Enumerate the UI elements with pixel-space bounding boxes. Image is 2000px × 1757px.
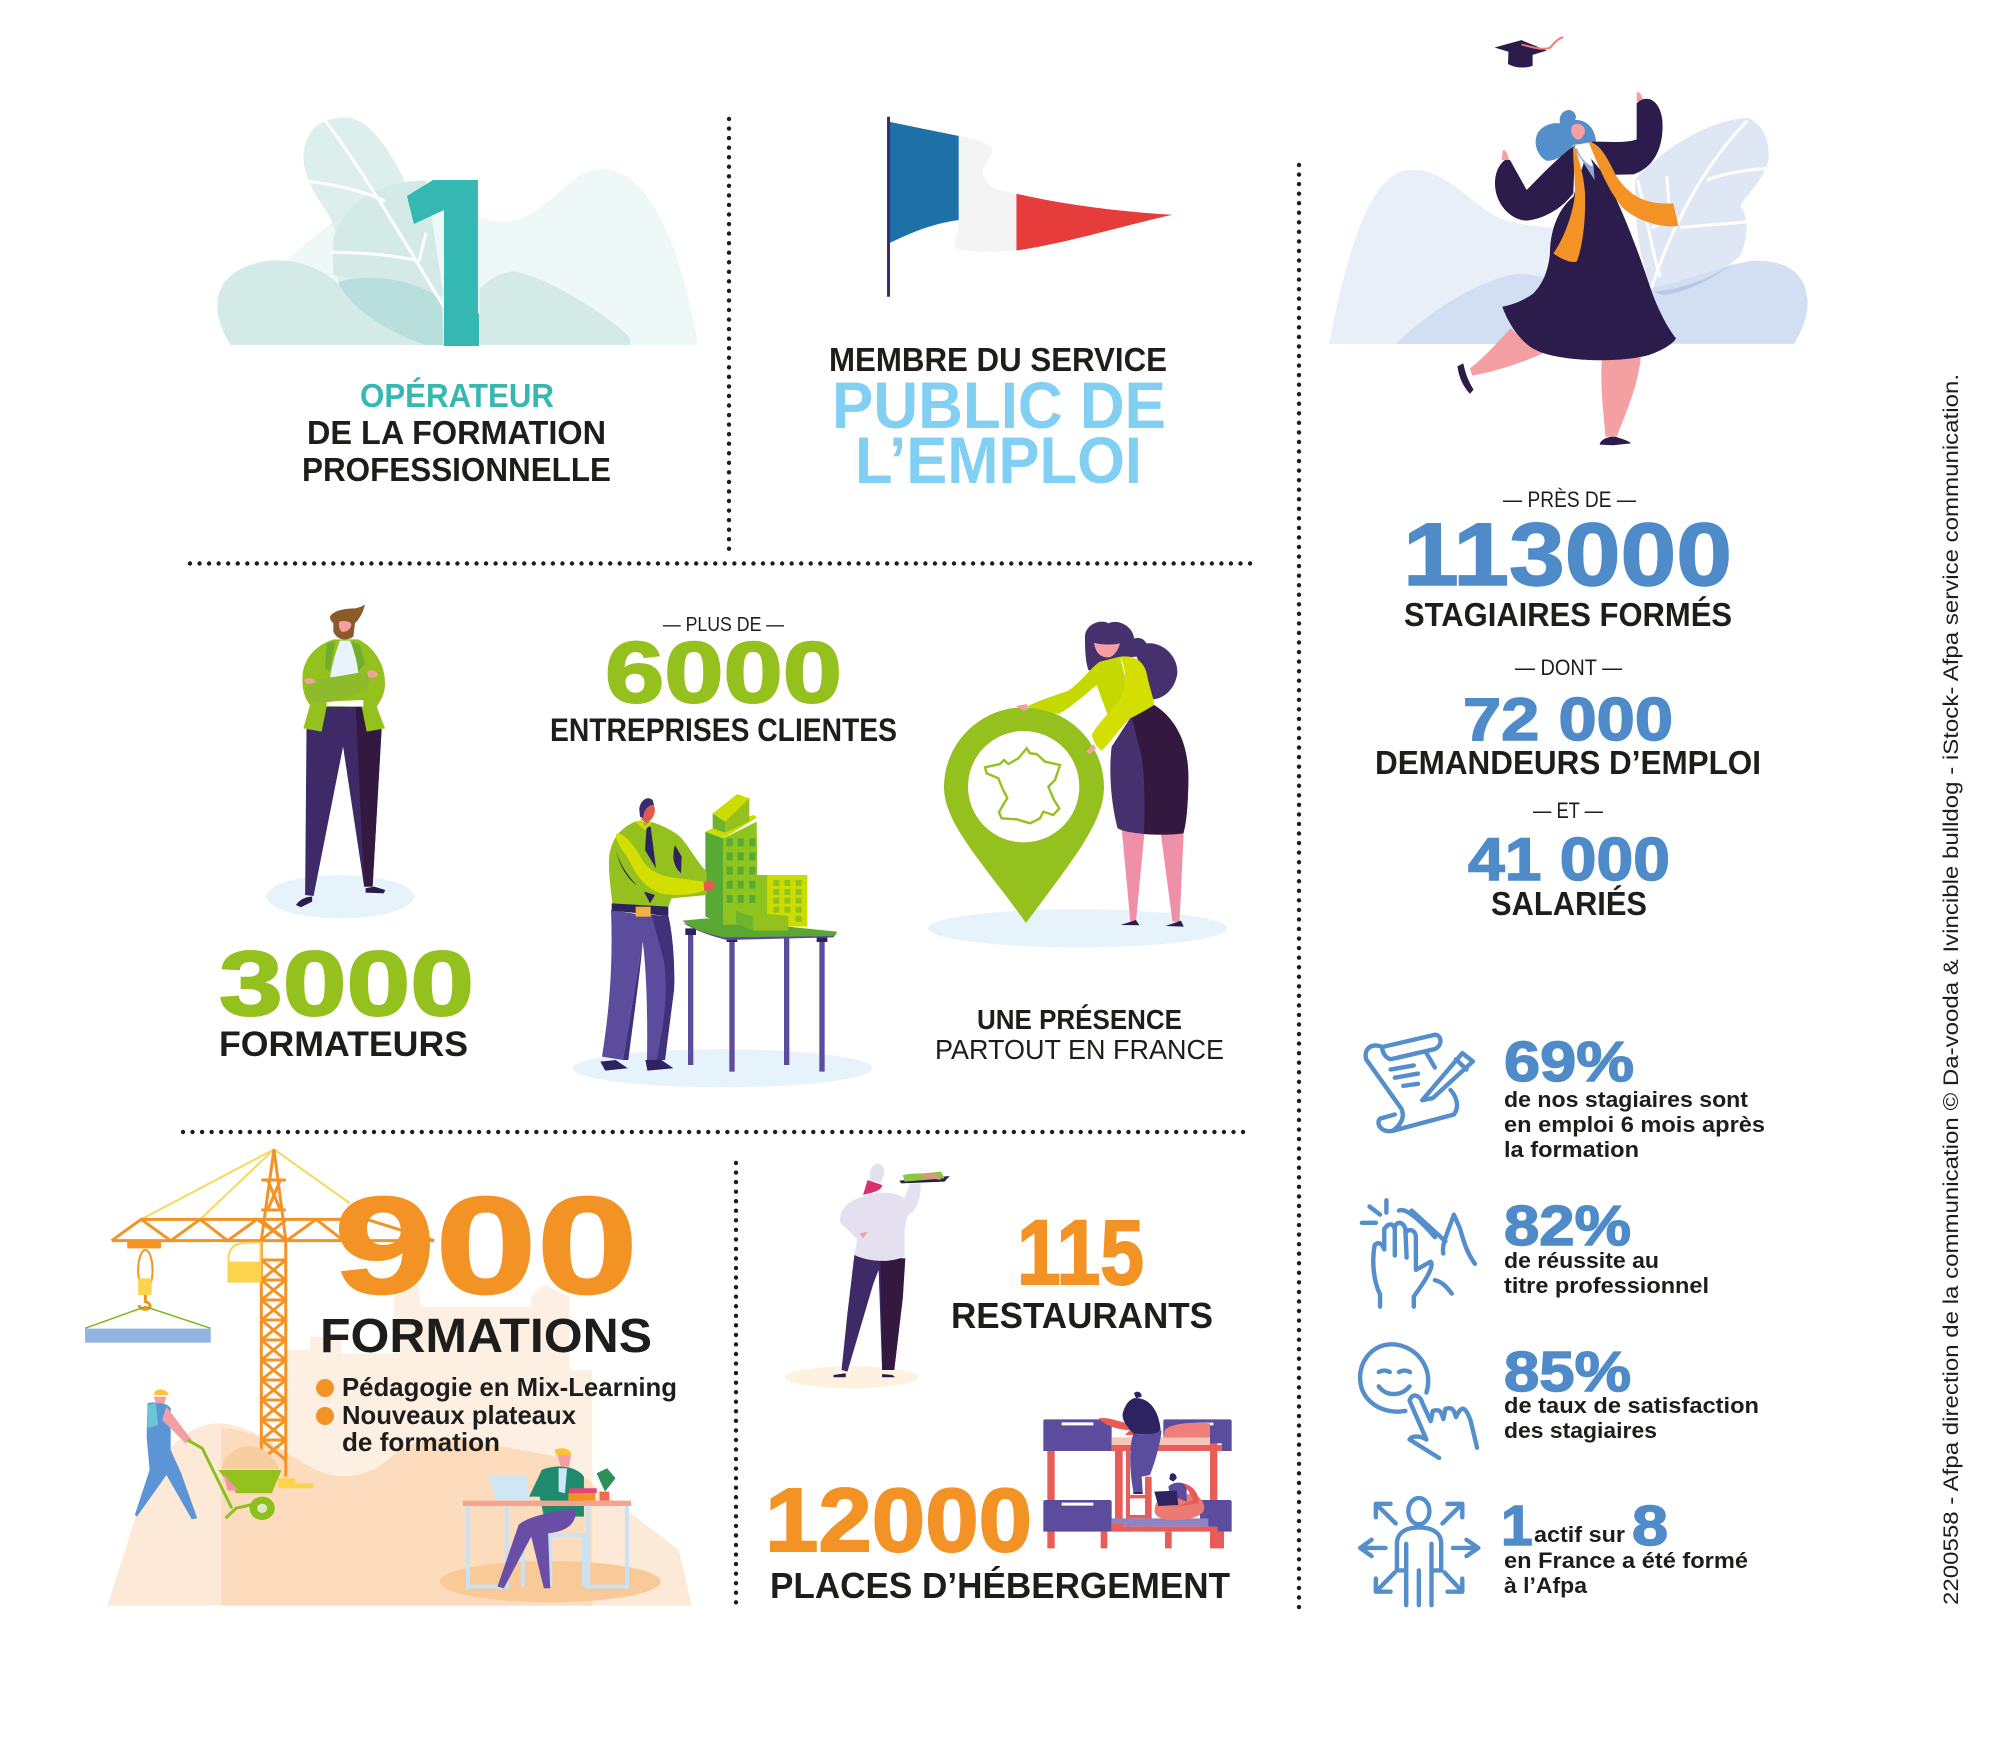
stat: 1 actif sur 8: 1 xyxy=(1501,1494,1533,1558)
illustration: graduate with plants xyxy=(1329,37,1808,445)
list: pédagogie et plateaux: de formation xyxy=(342,1427,500,1457)
panel: stagiaires xyxy=(1329,37,1808,922)
stat: 85%: des stagiaires xyxy=(1504,1418,1657,1443)
stat: 1 actif sur 8: en France a été formé xyxy=(1504,1548,1748,1573)
text: membre du service: MEMBRE DU SERVICE xyxy=(829,341,1167,378)
heading: public de l'emploi xyxy=(832,368,1166,497)
stat: 41 000 salariés: 41 000 xyxy=(1468,826,1670,893)
stat: 72 000 demandeurs: 72 000 xyxy=(1463,686,1673,753)
stat: 85% xyxy=(1504,1340,1759,1443)
woman and pin xyxy=(944,622,1188,923)
panel: 6000 entreprises clientes xyxy=(550,614,897,1087)
stat: 82%: titre professionnel xyxy=(1504,1273,1709,1298)
number: 3000: 3000 xyxy=(219,933,474,1035)
number: 115: 115 xyxy=(1017,1202,1144,1304)
credit line: 2200558 - Afpa direction de la communication © Da-vooda & Ivincible bulldog - iStock- Afpa service communication. xyxy=(1940,374,1963,1605)
list: pédagogie et plateaux: Nouveaux plateaux xyxy=(342,1400,577,1430)
illustration: businessman with building model xyxy=(573,794,872,1087)
number: 12000: 12000 xyxy=(765,1471,1032,1571)
stat: 82% xyxy=(1504,1194,1709,1298)
panel: 85% satisfaction xyxy=(1360,1340,1759,1458)
panel: 12000 places d'hébergement xyxy=(765,1392,1232,1606)
text: de la formation professionnelle xyxy=(302,414,611,488)
heading: formations: FORMATIONS xyxy=(320,1310,652,1363)
label: entreprises clientes: ENTREPRISES CLIENTES xyxy=(550,712,897,748)
stat: 82%: de réussite au xyxy=(1504,1248,1659,1273)
icon: french flag xyxy=(889,117,1172,297)
panel: 115 restaurants xyxy=(785,1163,1213,1388)
illustration: construction site xyxy=(85,1149,691,1606)
stat: 41 000 salariés: SALARIÉS xyxy=(1491,885,1647,922)
number: 6000: 6000 xyxy=(605,625,842,721)
stat: 69% xyxy=(1504,1030,1765,1162)
stat: 72 000 demandeurs: DEMANDEURS D’EMPLOI xyxy=(1375,744,1761,781)
illustration: bunk beds xyxy=(1043,1392,1232,1548)
plants and lower body xyxy=(1329,37,1808,445)
icon: person with arrows xyxy=(1360,1498,1478,1605)
illustration: bearded man xyxy=(266,604,414,918)
stat: 1 actif sur 8: 8 xyxy=(1632,1494,1668,1558)
stat: 82%: 82% xyxy=(1504,1194,1631,1258)
stat: 113000 stagiaires xyxy=(1403,487,1732,633)
heading: public de l'emploi: L’EMPLOI xyxy=(855,423,1142,497)
shadow and shoes xyxy=(573,1049,872,1087)
gown, scarf and head xyxy=(1495,92,1678,360)
illustration: woman with map pin xyxy=(928,622,1227,947)
panel: 82% réussite xyxy=(1362,1194,1709,1307)
stat: 113000 stagiaires: 113000 xyxy=(1403,504,1732,604)
torso and head xyxy=(302,604,385,732)
number: 900: 900 xyxy=(334,1169,638,1323)
text: plus de: — PLUS DE — xyxy=(663,614,784,636)
stat: 69%: en emploi 6 mois après xyxy=(1504,1112,1765,1137)
label: places d'hébergement: PLACES D’HÉBERGEMENT xyxy=(770,1565,1230,1606)
man, table and building xyxy=(602,794,837,1072)
icon: clapping hands xyxy=(1362,1200,1475,1307)
stat: 69%: la formation xyxy=(1504,1137,1639,1162)
stat: 72 000 demandeurs xyxy=(1375,655,1761,781)
text: une présence partout en France xyxy=(935,1004,1224,1065)
panel: 900 formations xyxy=(85,1149,691,1606)
panel: 69% en emploi xyxy=(1366,1030,1765,1162)
stat: 72 000 demandeurs: — DONT — xyxy=(1515,655,1622,680)
panel: service public de l'emploi xyxy=(829,117,1172,497)
panel: 1 actif sur 8 xyxy=(1360,1494,1748,1605)
list: pédagogie et plateaux xyxy=(316,1372,677,1457)
legs and shadow xyxy=(266,707,414,918)
stat: 1 actif sur 8: à l’Afpa xyxy=(1504,1573,1588,1598)
text: une présence partout en France: PARTOUT EN FRANCE xyxy=(935,1034,1224,1065)
list: pédagogie et plateaux: Pédagogie en Mix-Learning xyxy=(342,1372,677,1402)
illustration: teal plants xyxy=(217,118,698,345)
heading: opérateur: OPÉRATEUR xyxy=(360,377,554,414)
stat: 1 actif sur 8 xyxy=(1501,1494,1748,1598)
heading: public de l'emploi: PUBLIC DE xyxy=(832,368,1166,442)
label: restaurants: RESTAURANTS xyxy=(951,1295,1213,1336)
panel: opérateur de la formation xyxy=(217,118,698,488)
stat: 85%: de taux de satisfaction xyxy=(1504,1393,1759,1418)
stat: 69%: 69% xyxy=(1504,1030,1634,1094)
icon: scroll and pencil xyxy=(1366,1035,1473,1131)
stat: 113000 stagiaires: — PRÈS DE — xyxy=(1503,487,1636,512)
panel: 3000 formateurs xyxy=(219,604,474,1064)
illustration: chef with tray xyxy=(785,1163,950,1388)
panel: présence en France xyxy=(928,622,1227,1065)
text: de la formation professionnelle: DE LA FORMATION xyxy=(307,414,606,451)
shadow and legs xyxy=(928,830,1227,947)
text: une présence partout en France: UNE PRÉSENCE xyxy=(977,1004,1182,1035)
icon: smiley and hand xyxy=(1360,1344,1477,1458)
stat: 41 000 salariés xyxy=(1468,798,1670,922)
number 1: 1 xyxy=(382,128,515,396)
label: formateurs: FORMATEURS xyxy=(219,1025,468,1064)
text: de la formation professionnelle: PROFESSIONNELLE xyxy=(302,451,611,488)
stat: 1 actif sur 8: actif sur xyxy=(1534,1522,1625,1547)
stat: 113000 stagiaires: STAGIAIRES FORMÉS xyxy=(1404,596,1732,633)
stat: 41 000 salariés: — ET — xyxy=(1533,798,1603,823)
stat: 85%: 85% xyxy=(1504,1340,1631,1404)
stat: 69%: de nos stagiaires sont xyxy=(1504,1087,1749,1112)
